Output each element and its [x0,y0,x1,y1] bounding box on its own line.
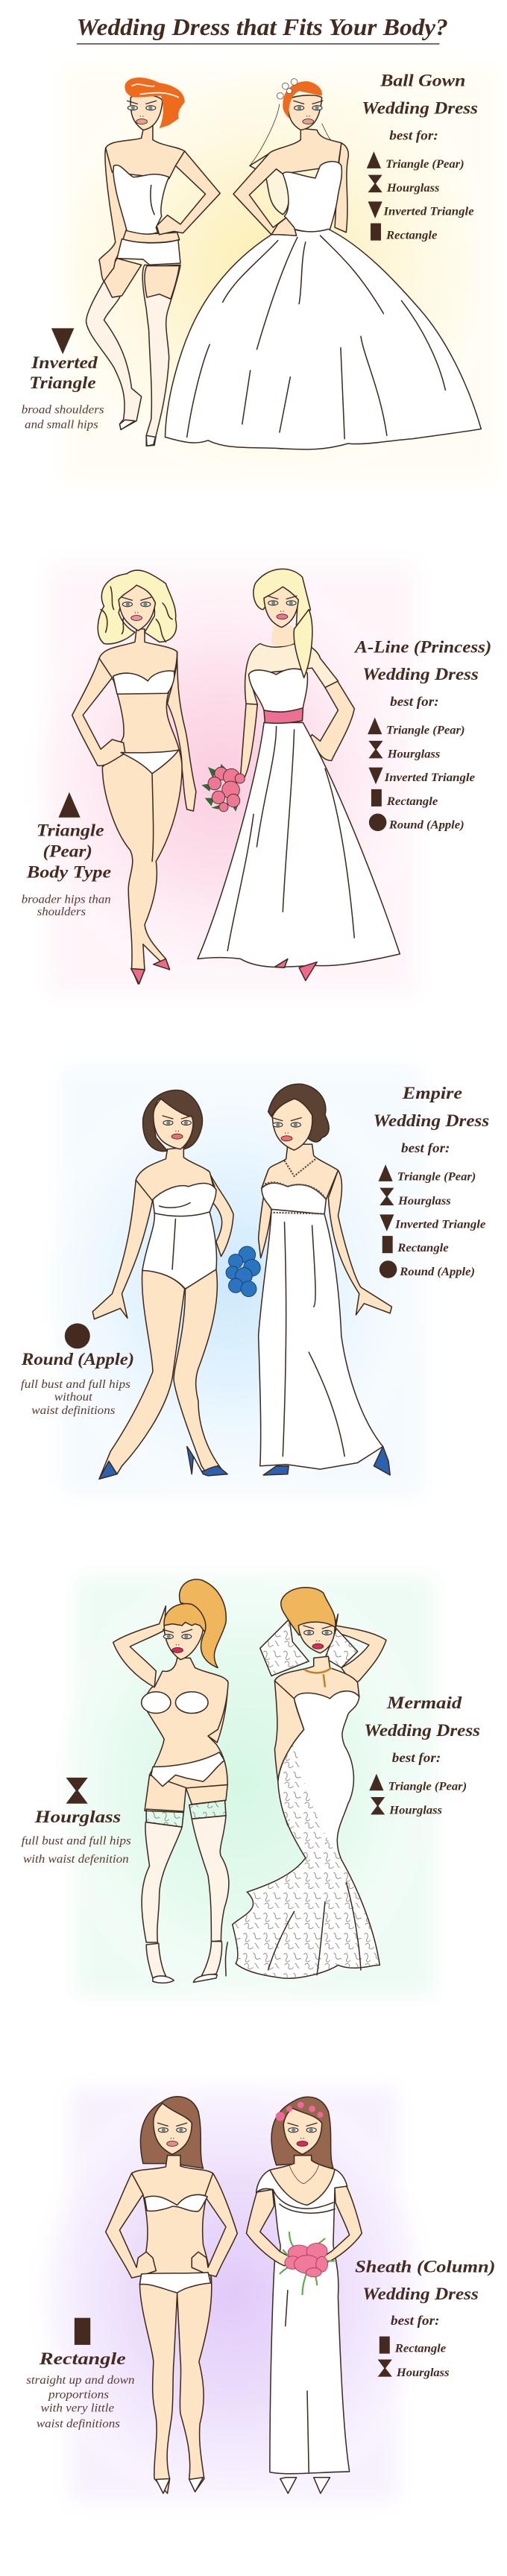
figure: ball gown dress [165,79,481,449]
text: hourglass label: with waist defenition [23,1853,129,1866]
text: round apple label [21,1323,134,1417]
icon: flower crown [276,2102,323,2121]
text: sheath list: best for: [391,2313,439,2328]
text: hourglass label: full bust and full hips [22,1835,131,1848]
text: sheath list [355,2258,495,2379]
figure: sheath dress [246,2097,362,2493]
text: a-line list: Round (Apple) [388,819,465,832]
text: a-line list: Hourglass [387,748,440,761]
text: mermaid list: Mermaid [386,1693,463,1713]
figure: pear body [72,570,196,984]
text: ball gown list: best for: [389,127,438,142]
text: empire list: Triangle (Pear) [397,1171,476,1184]
text: a-line list: Triangle (Pear) [386,724,465,736]
text: a-line list: A-Line (Princess) [353,637,491,657]
text: empire list: Inverted Triangle [394,1219,485,1231]
text: empire list: Wedding Dress [374,1111,489,1131]
text: round apple label: waist definitions [31,1404,115,1417]
text: mermaid list: Hourglass [388,1805,442,1817]
panel: empire and round apple [21,1063,489,1505]
title: Wedding Dress that Fits Your Body? [76,14,448,40]
text: triangle pear label: (Pear) [43,842,92,862]
text: a-line list: best for: [390,694,439,709]
text: rectangle label: straight up and down [26,2374,135,2387]
text: empire list: Hourglass [397,1195,451,1208]
text: empire list: Round (Apple) [399,1266,475,1278]
figure: apple body [92,1090,233,1479]
text: triangle pear label: Triangle [37,821,104,841]
panel: mermaid and hourglass [22,1561,480,2006]
figure: empire dress [226,1084,391,1475]
figure: hourglass body [113,1579,229,1983]
text: rectangle label: Rectangle [39,2349,126,2369]
text: a-line list: Rectangle [386,795,438,808]
text: sheath list: Rectangle [394,2342,446,2355]
text: inverted triangle label: Inverted [31,353,98,373]
text: ball gown list: Inverted Triangle [382,206,474,218]
text: rectangle label: with very little [41,2402,114,2415]
text: empire list: Rectangle [397,1242,449,1254]
text: round apple label: full bust and full hips [21,1378,130,1391]
icon: blue bouquet [226,1246,260,1297]
text: round apple label: Round (Apple) [21,1350,134,1369]
text: empire list: best for: [401,1140,450,1155]
text: empire list [374,1084,489,1278]
text: ball gown list: Triangle (Pear) [385,158,465,171]
panel: a-line and triangle pear [19,558,491,993]
text: sheath list: Hourglass [396,2367,450,2379]
panel: ball gown and inverted triangle [22,55,500,484]
text: inverted triangle label: Triangle [29,373,96,393]
text: rectangle label: waist definitions [37,2418,120,2431]
text: a-line list: Wedding Dress [362,665,479,684]
text: triangle pear label: shoulders [37,906,86,918]
text: ball gown list: Ball Gown [380,72,465,91]
text: inverted triangle label [22,328,104,432]
text: mermaid list: Triangle (Pear) [388,1780,467,1793]
text: empire list: Empire [402,1084,462,1103]
text: sheath list: Wedding Dress [362,2285,479,2304]
text: triangle pear label: Body Type [26,862,111,882]
text: a-line list [353,637,491,832]
text: mermaid list: best for: [392,1750,441,1765]
text: sheath list: Sheath (Column) [355,2258,495,2277]
figure: a-line dress [198,569,400,981]
text: hourglass label: Hourglass [34,1808,121,1827]
text: inverted triangle label: broad shoulders [22,404,104,417]
text: ball gown list [362,72,478,242]
text: hourglass label [22,1778,131,1866]
text: mermaid list: Wedding Dress [364,1721,480,1740]
figure: rectangle body [106,2097,237,2493]
text: a-line list: Inverted Triangle [384,771,475,784]
text: ball gown list: Wedding Dress [362,99,478,119]
text: triangle pear label: broader hips than [22,893,111,906]
icon: pink bouquet [201,764,245,812]
text: rectangle label [26,2318,135,2431]
text: mermaid list [364,1693,480,1817]
figure: inverted triangle body [86,78,220,446]
icon: pink and green bouquet [280,2232,335,2295]
text: ball gown list: Hourglass [386,182,439,195]
figure: mermaid dress [233,1588,386,1978]
text: round apple label: without [54,1391,93,1404]
panel: sheath and rectangle [23,2073,495,2514]
text: ball gown list: Rectangle [385,229,437,242]
text: inverted triangle label: and small hips [25,419,98,432]
text: triangle pear label [22,792,111,918]
text: rectangle label: proportions [48,2388,109,2401]
